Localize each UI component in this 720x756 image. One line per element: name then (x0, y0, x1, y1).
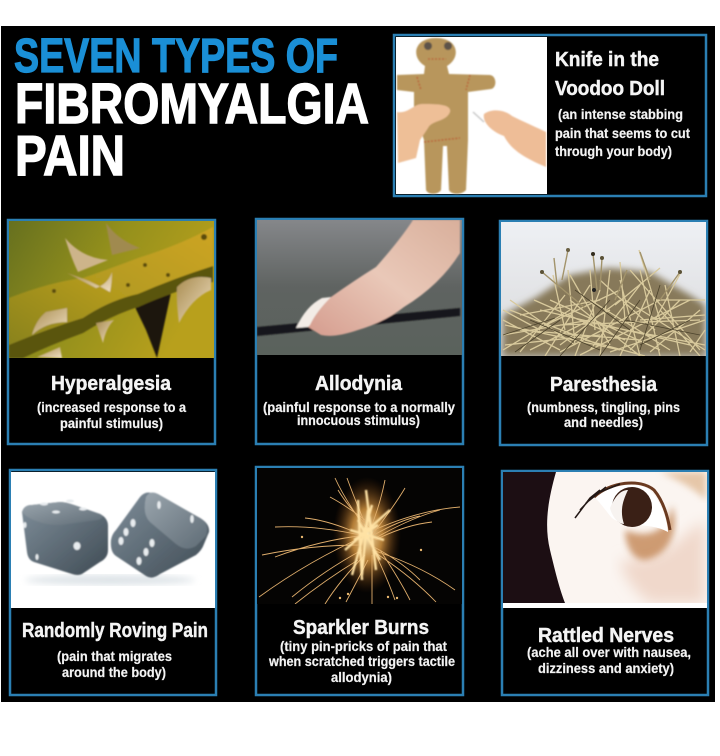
paresthesia caption (527, 374, 680, 430)
panel: rattled nerves (502, 471, 708, 695)
sparkler caption: when scratched triggers tactile (268, 654, 455, 669)
panel: hyperalgesia (8, 220, 215, 444)
sparkler caption: allodynia) (331, 670, 392, 685)
photo: thorny branch (9, 221, 214, 358)
rattled nerves caption: (ache all over with nausea, (527, 645, 691, 660)
rattled nerves caption: dizziness and anxiety) (538, 661, 674, 676)
doll caption: through your body) (555, 144, 672, 159)
photo: close-up of eye (503, 472, 707, 608)
panel: paresthesia (500, 221, 707, 445)
rattled nerves caption (527, 625, 691, 676)
panel: allodynia (256, 219, 463, 444)
doll caption: Knife in the (555, 49, 659, 71)
sparkler caption: Sparkler Burns (293, 617, 429, 639)
allodynia caption: innocuous stimulus) (297, 413, 420, 428)
photo: sparkler (257, 468, 462, 604)
allodynia caption: Allodynia (315, 373, 403, 395)
panel: sparkler burns (256, 467, 463, 695)
hyperalgesia caption: painful stimulus) (60, 416, 163, 431)
paresthesia caption: (numbness, tingling, pins (527, 400, 680, 415)
paresthesia caption: Paresthesia (550, 374, 658, 396)
title: FIBROMYALGIA (15, 72, 369, 136)
allodynia caption: (painful response to a normally (263, 400, 455, 415)
roving pain caption: around the body) (62, 665, 166, 680)
photo: voodoo doll held by hands (396, 37, 547, 194)
roving pain caption: Randomly Roving Pain (22, 620, 208, 642)
hyperalgesia caption: (increased response to a (37, 400, 186, 415)
photo: fingertip on wood (257, 220, 462, 355)
rattled nerves caption: Rattled Nerves (538, 625, 674, 647)
sparkler caption: (tiny pin-pricks of pain that (280, 639, 447, 654)
panel: randomly roving pain (10, 470, 216, 695)
doll caption (555, 49, 690, 159)
sparkler caption (268, 617, 455, 685)
title (14, 30, 369, 188)
photo: pile of pins (501, 222, 706, 356)
hyperalgesia caption (37, 373, 186, 431)
hyperalgesia caption: Hyperalgesia (51, 373, 172, 395)
roving pain caption (22, 620, 208, 680)
paresthesia caption: and needles) (564, 415, 643, 430)
photo: two dice (11, 472, 215, 608)
allodynia caption (263, 373, 455, 428)
roving pain caption: (pain that migrates (57, 649, 172, 664)
doll caption: Voodoo Doll (555, 78, 665, 100)
panel: knife in the voodoo doll (394, 35, 706, 196)
title: PAIN (15, 124, 125, 188)
title: SEVEN TYPES OF (14, 30, 338, 83)
doll caption: pain that seems to cut (555, 126, 690, 141)
doll caption: (an intense stabbing (558, 107, 683, 122)
